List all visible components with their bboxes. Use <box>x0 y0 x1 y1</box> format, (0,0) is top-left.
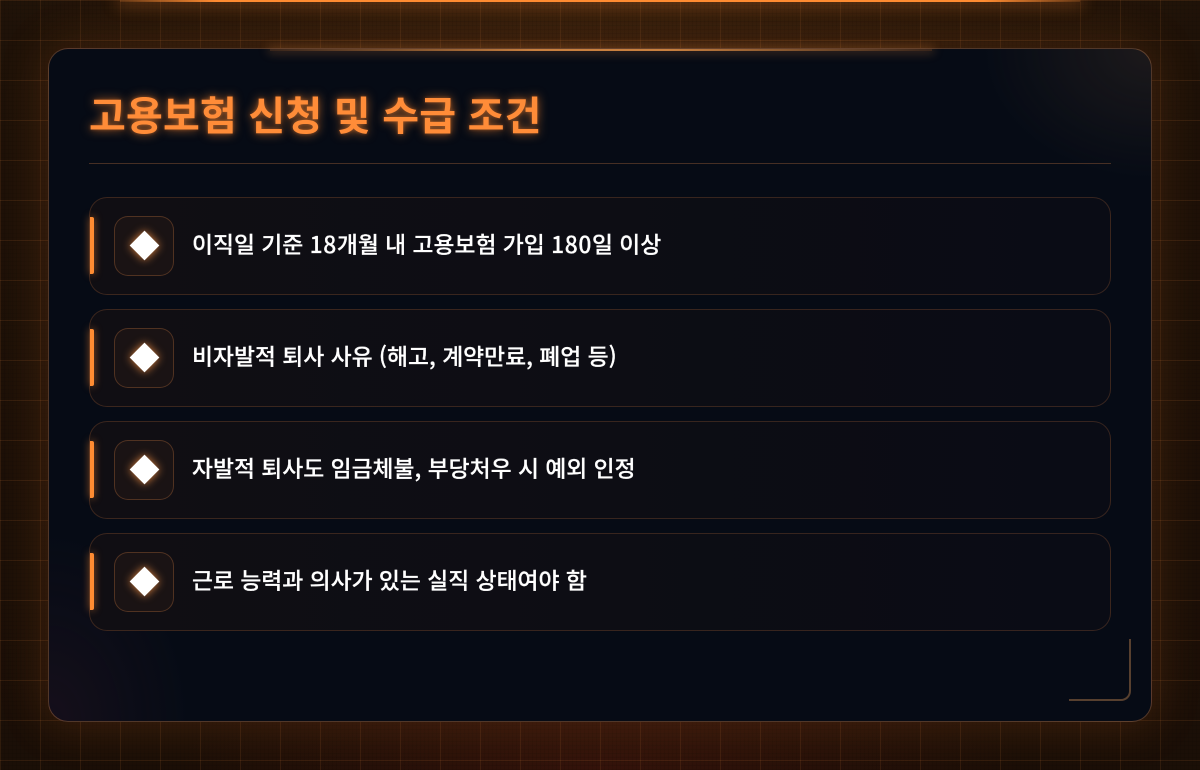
title: 고용보험 신청 및 수급 조건 <box>89 84 542 142</box>
icon: diamond 3 <box>114 440 174 500</box>
card top accent line <box>270 49 932 51</box>
top glow bar <box>120 0 1080 2</box>
list item 2 <box>89 309 1111 407</box>
item text 2: 비자발적 퇴사 사유 (해고, 계약만료, 폐업 등) <box>192 338 617 372</box>
item text 3: 자발적 퇴사도 임금체불, 부당처우 시 예외 인정 <box>192 450 636 484</box>
list item 3 <box>89 421 1111 519</box>
icon: diamond 4 <box>114 552 174 612</box>
list item 1 <box>89 197 1111 295</box>
item text 4: 근로 능력과 의사가 있는 실직 상태여야 함 <box>192 562 587 596</box>
icon: diamond 1 <box>114 216 174 276</box>
list item 4 <box>89 533 1111 631</box>
corner bracket decoration <box>1069 639 1131 701</box>
icon: diamond 2 <box>114 328 174 388</box>
item text 1: 이직일 기준 18개월 내 고용보험 가입 180일 이상 <box>192 226 661 260</box>
